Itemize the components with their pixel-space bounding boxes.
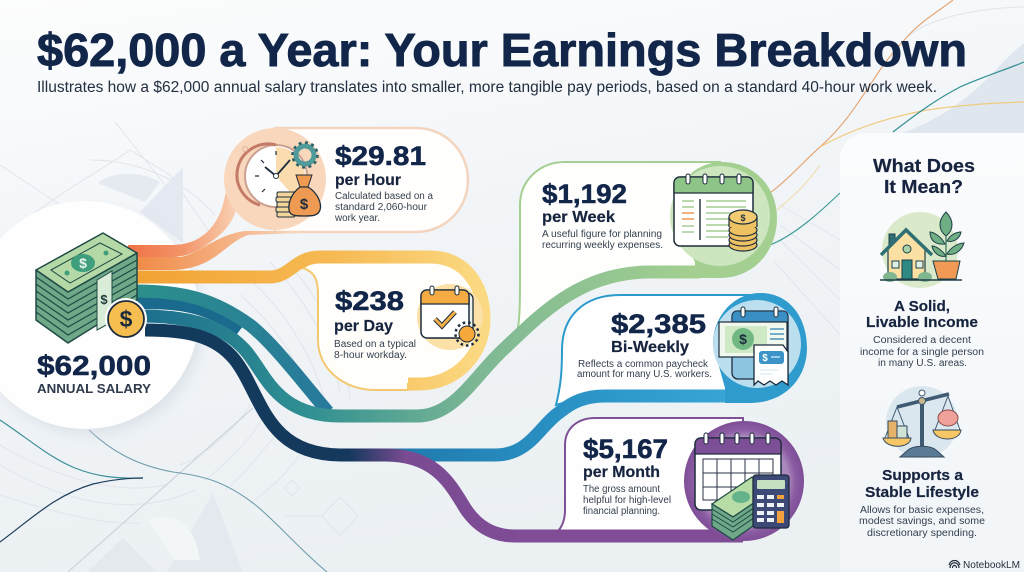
text: bi-weekly: Bi-Weekly	[611, 339, 689, 356]
panel: what does it mean	[840, 133, 1024, 572]
card backgrounds	[275, 128, 752, 536]
icon: budget calendar with coins	[670, 162, 777, 278]
card: bi-weekly	[577, 293, 807, 403]
salary label: ANNUAL SALARY	[37, 381, 151, 396]
text: per day: Based on a typical	[334, 339, 416, 350]
text: per week: recurring weekly expenses.	[542, 240, 663, 251]
text: per month: $5,167	[583, 434, 668, 464]
card: per day	[334, 284, 483, 361]
text: per hour: standard 2,060-hour	[335, 202, 428, 213]
text: bi-weekly: amount for many U.S. workers.	[577, 369, 712, 380]
icon: cash stack with coin: $	[120, 306, 133, 332]
text: per week: per Week	[542, 209, 615, 226]
ribbon: daily	[135, 257, 484, 384]
point: solid livable income: income for a single person	[860, 347, 984, 358]
panel heading: It Mean?	[884, 176, 963, 197]
icon: budget calendar with coins: $	[740, 213, 746, 223]
text: per month: financial planning.	[583, 506, 660, 517]
panel heading	[873, 155, 975, 197]
text: per hour	[334, 141, 433, 224]
text: per week: $1,192	[542, 179, 627, 209]
icon: clock, gear and money bag: $	[300, 196, 309, 213]
text: bi-weekly	[577, 309, 712, 380]
text: per day: $238	[335, 286, 404, 316]
panel heading: What Does	[873, 155, 975, 176]
card: per hour	[224, 128, 433, 230]
text: per week: A useful figure for planning	[542, 229, 662, 240]
title: $62,000 a Year: Your Earnings Breakdown	[37, 24, 967, 76]
point: solid livable income: Considered a decent	[873, 335, 971, 346]
point: stable lifestyle: discretionary spending.	[867, 528, 977, 539]
text: per month: per Month	[583, 464, 660, 481]
text: per hour: $29.81	[335, 141, 426, 171]
subtitle: Illustrates how a $62,000 annual salary translates into smaller, more tangible pay periods, based on a standard 40-hour work week.	[37, 79, 937, 96]
ribbon: hourly	[128, 180, 238, 257]
watermark: NotebookLM: NotebookLM	[963, 560, 1020, 571]
point: stable lifestyle: Stable Lifestyle	[865, 484, 979, 501]
ribbon: bi-weekly	[370, 396, 730, 455]
text: per day	[334, 286, 416, 361]
icon: cash stack with coin: $	[100, 292, 108, 307]
icon: clock, gear and money bag	[224, 128, 326, 230]
ribbon: monthly	[145, 330, 743, 536]
text: per hour: per Hour	[335, 172, 401, 189]
point: solid livable income	[860, 298, 984, 369]
point: stable lifestyle	[859, 467, 985, 539]
text: per day: per Day	[334, 318, 393, 335]
card: per month	[583, 421, 804, 541]
text: per month: The gross amount	[583, 484, 660, 495]
icon: paycheck and receipt: $	[762, 353, 768, 364]
salary label: $62,000	[37, 350, 151, 381]
text: per week	[542, 179, 663, 251]
icon: calendar, cash and calculator	[684, 421, 804, 541]
card: per week	[542, 162, 777, 278]
point: stable lifestyle: modest savings, and some	[859, 516, 985, 527]
icon: paycheck and receipt: $	[739, 331, 747, 347]
ribbon: hourly lower	[135, 231, 300, 270]
text: per day: 8-hour workday.	[334, 350, 407, 361]
text: per hour: work year.	[334, 213, 380, 224]
salary label	[37, 350, 151, 396]
text: per month: helpful for high-level	[583, 495, 671, 506]
text: bi-weekly: Reflects a common paycheck	[578, 359, 709, 370]
icon: cash stack with coin: $	[79, 255, 87, 271]
point: stable lifestyle: Supports a	[882, 467, 964, 484]
text: per hour: Calculated based on a	[335, 191, 433, 202]
text: per month	[583, 434, 671, 517]
text: bi-weekly: $2,385	[611, 309, 706, 339]
icon: cash stack with coin	[36, 233, 147, 343]
salary circle	[0, 201, 202, 434]
point: solid livable income: Livable Income	[866, 314, 978, 331]
icon: calendar with check	[417, 284, 483, 350]
point: stable lifestyle: Allows for basic expenses,	[860, 505, 984, 516]
icon: house and plant	[880, 212, 964, 288]
icon: balance scale with piggy bank	[883, 386, 961, 458]
point: solid livable income: A Solid,	[894, 298, 950, 315]
ribbon: weekly	[135, 272, 700, 416]
icon: paycheck and receipt	[713, 293, 807, 403]
point: solid livable income: in many U.S. areas.	[878, 358, 967, 369]
